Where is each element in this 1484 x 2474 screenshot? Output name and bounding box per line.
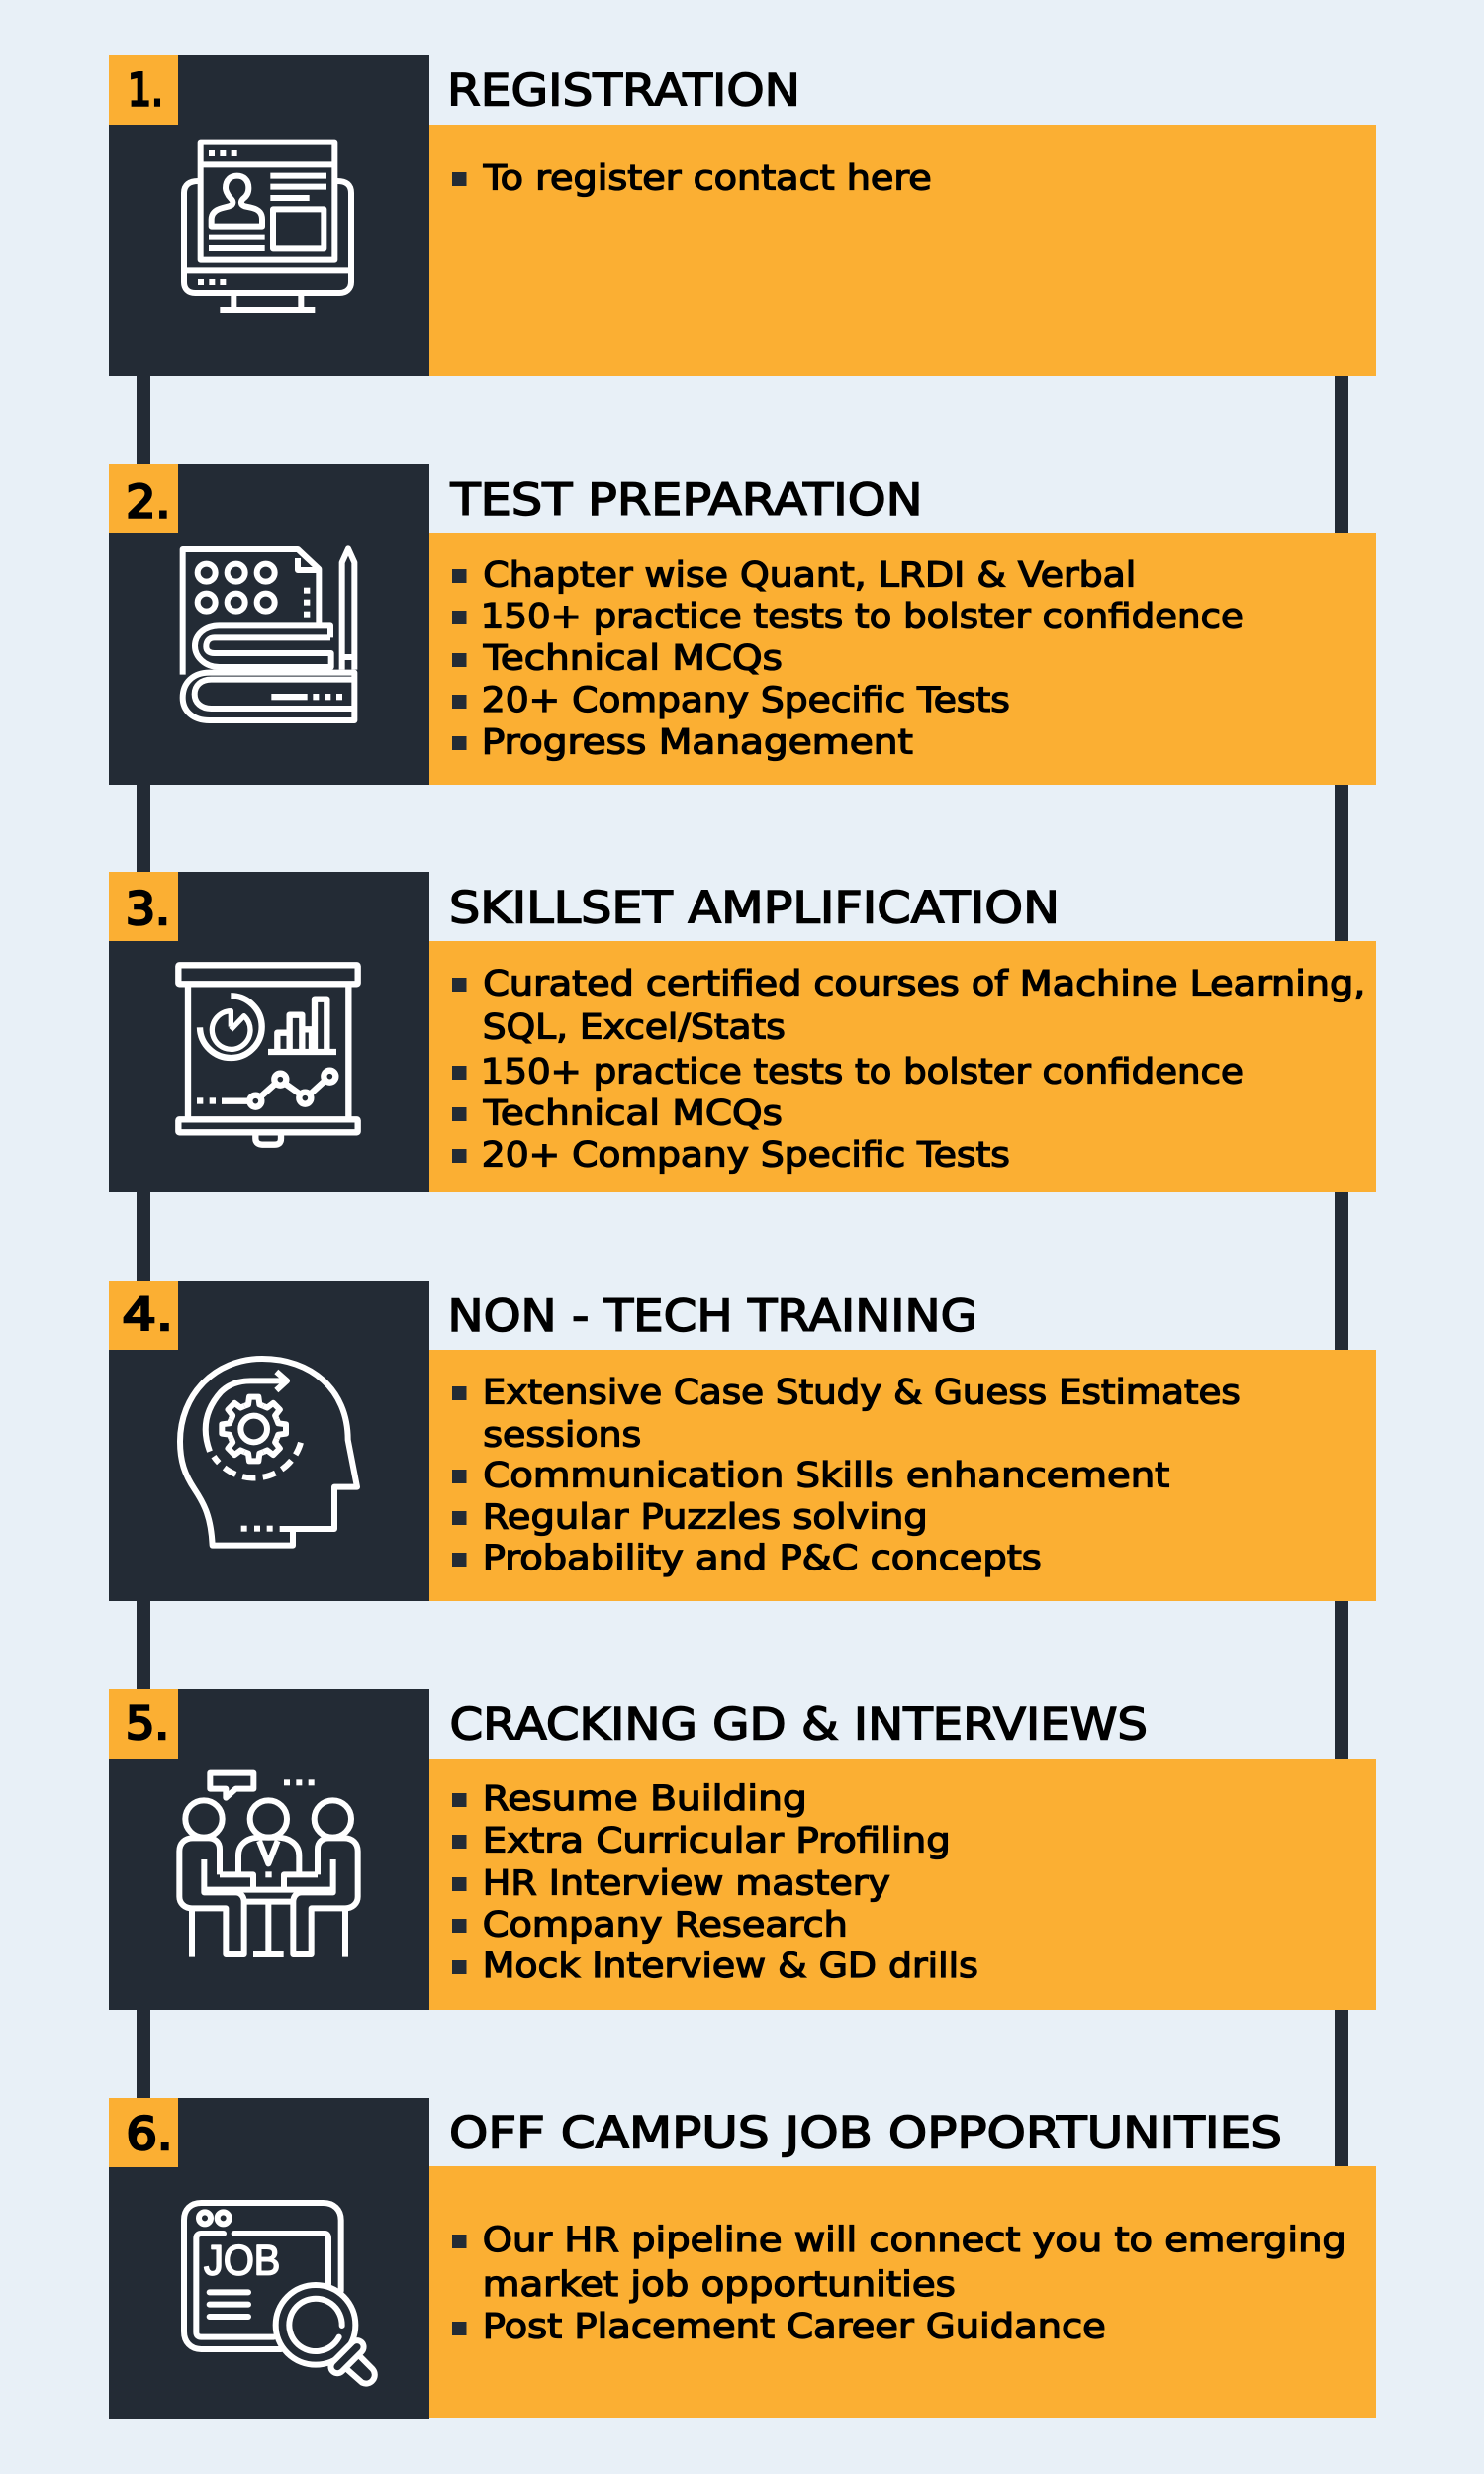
bullet list bbox=[452, 1779, 978, 1986]
bullet list: To register contact here bbox=[483, 159, 932, 199]
icon: three people at a table bbox=[179, 1773, 358, 1957]
panel: step 4 non-tech training: 4. bbox=[123, 1288, 173, 1341]
bullet list: Extra Curricular Profiling bbox=[483, 1821, 951, 1860]
panel: step 6 off campus job opportunities: 6. bbox=[127, 2108, 172, 2160]
bullet list: Extensive Case Study & Guess Estimates bbox=[483, 1373, 1241, 1412]
bullet list: Technical MCQs bbox=[483, 639, 783, 679]
bullet list: Resume Building bbox=[483, 1779, 807, 1819]
bullet list: 150+ practice tests to bolster confidence bbox=[481, 1052, 1244, 1092]
panel: step 1 registration: 1. bbox=[128, 64, 163, 117]
bullet list: Chapter wise Quant, LRDI & Verbal bbox=[483, 556, 1136, 596]
bullet list: Post Placement Career Guidance bbox=[483, 2308, 1106, 2347]
bullet list: 150+ practice tests to bolster confidence bbox=[481, 597, 1244, 636]
bullet list: Communication Skills enhancement bbox=[483, 1456, 1169, 1495]
bullet list: 20+ Company Specific Tests bbox=[482, 681, 1010, 720]
bullet list: HR Interview mastery bbox=[483, 1864, 890, 1904]
icon: projector screen with charts bbox=[178, 965, 358, 1145]
panel: step 5 cracking GD and interviews: 5. bbox=[126, 1697, 169, 1750]
bullet list: Company Research bbox=[483, 1906, 848, 1946]
bullet list: SQL, Excel/Stats bbox=[483, 1007, 786, 1047]
icon: books, test sheet and pencil bbox=[183, 548, 354, 720]
right connector rail bbox=[1335, 366, 1348, 2177]
heading: OFF CAMPUS JOB OPPORTUNITIES bbox=[449, 2109, 1282, 2159]
panel: step 4 non-tech training bbox=[109, 1281, 1376, 1601]
heading: NON - TECH TRAINING bbox=[447, 1291, 977, 1342]
panel: step 1 registration bbox=[109, 55, 1376, 376]
bullet list bbox=[452, 1373, 1241, 1578]
bullet list: Curated certified courses of Machine Learning, bbox=[483, 964, 1365, 1003]
heading: SKILLSET AMPLIFICATION bbox=[449, 884, 1060, 934]
bullet list: market job opportunities bbox=[483, 2265, 956, 2305]
heading: REGISTRATION bbox=[447, 66, 800, 117]
bullet list: Regular Puzzles solving bbox=[483, 1497, 928, 1537]
left connector rail bbox=[137, 366, 150, 2108]
bullet list: Our HR pipeline will connect you to emerging bbox=[483, 2221, 1346, 2260]
icon: computer with profile bbox=[184, 143, 351, 310]
icon: job search window with magnifier: JOB bbox=[204, 2237, 280, 2285]
bullet list bbox=[452, 2221, 1346, 2347]
panel: step 2 test preparation: 2. bbox=[126, 476, 170, 528]
panel: step 3 skillset amplification: 3. bbox=[126, 883, 170, 935]
heading: CRACKING GD & INTERVIEWS bbox=[449, 1700, 1148, 1750]
bullet list bbox=[452, 556, 1244, 763]
bullet list: Technical MCQs bbox=[483, 1094, 783, 1133]
heading: TEST PREPARATION bbox=[449, 475, 922, 525]
bullet list: sessions bbox=[483, 1416, 641, 1456]
icon: head with gear bbox=[180, 1359, 357, 1546]
panel: step 6 off campus job opportunities bbox=[109, 2098, 1376, 2419]
bullet list: Probability and P&C concepts bbox=[483, 1539, 1042, 1578]
bullet list: Mock Interview & GD drills bbox=[483, 1947, 978, 1986]
panel: step 2 test preparation bbox=[109, 464, 1376, 785]
bullet list: Progress Management bbox=[482, 723, 913, 763]
icon: job search window with magnifier bbox=[184, 2203, 375, 2384]
panel: step 3 skillset amplification bbox=[109, 872, 1376, 1192]
panel: step 5 cracking GD and interviews bbox=[109, 1689, 1376, 2010]
bullet list bbox=[452, 964, 1365, 1175]
bullet list: 20+ Company Specific Tests bbox=[482, 1135, 1010, 1175]
